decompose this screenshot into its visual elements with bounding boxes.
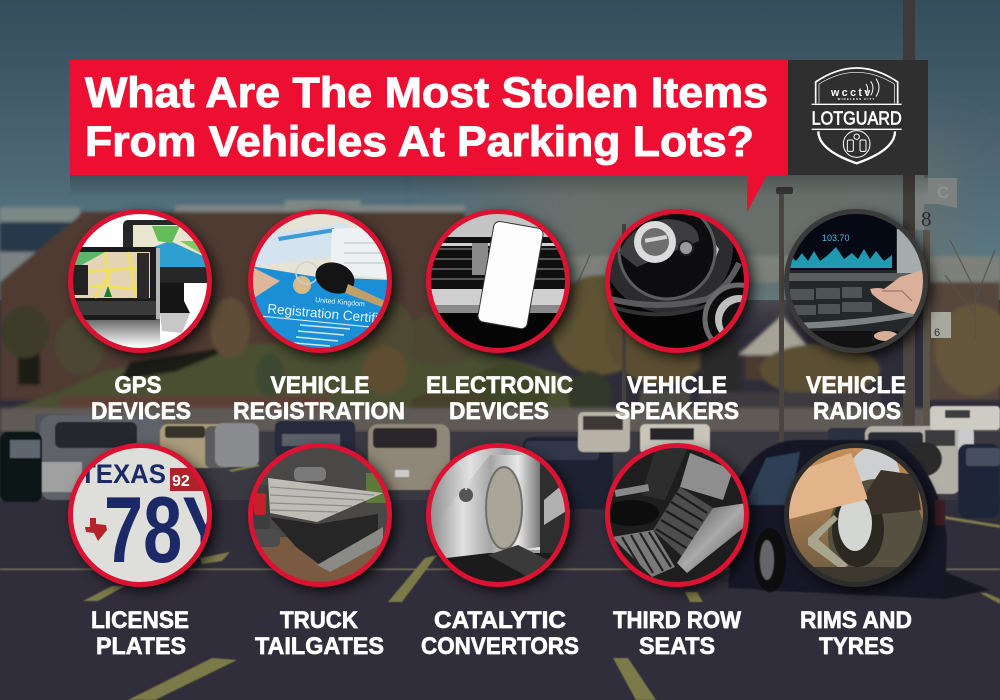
item: vehicle speakers	[604, 207, 761, 420]
title banner with speech-bubble tail	[70, 60, 928, 212]
icon: truck bed with tailgate	[250, 445, 390, 587]
label: VEHICLE	[627, 372, 727, 399]
sky	[0, 0, 1000, 300]
icon: GPS units	[68, 211, 213, 351]
lamp posts and lot signs: 6	[934, 327, 940, 339]
label: ELECTRONIC	[426, 372, 573, 399]
item: electronic devices	[426, 211, 573, 425]
icon: Texas plate: TEXAS	[80, 459, 166, 489]
logo wordmark: LOTGUARD	[812, 108, 902, 129]
label	[800, 607, 912, 660]
icon: Texas plate	[70, 445, 229, 585]
banner shadow	[70, 175, 928, 197]
label	[233, 372, 405, 425]
bare tree branches	[555, 240, 995, 350]
logo wordmark: WIRELESS CITY	[838, 97, 874, 101]
label: VEHICLE	[270, 372, 370, 399]
label: PLATES	[96, 633, 186, 660]
icon: Texas plate: 92	[172, 473, 190, 490]
item: rims and tyres	[786, 445, 926, 660]
icon: car speakers	[604, 207, 761, 364]
label: RADIOS	[813, 398, 901, 425]
label	[426, 372, 573, 425]
icon: Texas plate: 78Y	[104, 477, 229, 582]
icon: phone in air-vent mount	[428, 211, 568, 353]
item: truck tailgates	[250, 445, 390, 660]
label: THIRD ROW	[613, 607, 741, 634]
label: TAILGATES	[255, 633, 384, 660]
item: GPS devices	[68, 211, 213, 425]
label: GPS	[114, 372, 162, 399]
label: LICENSE	[91, 607, 189, 634]
label: DEVICES	[449, 398, 549, 425]
lamp posts and lot signs	[622, 0, 957, 450]
label: DEVICES	[91, 398, 191, 425]
lamp posts and lot signs: C	[937, 183, 949, 202]
label: SEATS	[639, 633, 715, 660]
icon: registration certificate with car key: Registration Certificate	[267, 301, 404, 328]
large dark blue car behind right circles	[725, 440, 990, 599]
label: RIMS AND	[800, 607, 912, 634]
icon: tyre being changed	[786, 445, 926, 591]
label: REGISTRATION	[233, 398, 405, 425]
asphalt	[0, 432, 1000, 502]
icon: dashboard radio: 103.70	[822, 233, 850, 243]
label	[615, 372, 739, 425]
label	[806, 372, 906, 425]
label	[421, 607, 579, 660]
banner tail	[747, 175, 767, 212]
label	[91, 372, 191, 425]
item: third row seats	[603, 445, 747, 660]
logo panel: LotGuard	[788, 60, 928, 175]
logo wordmark: wcctv	[830, 87, 870, 99]
icon: catalytic convertor	[428, 445, 568, 587]
label: TRUCK	[280, 607, 359, 634]
label: CONVERTORS	[421, 633, 579, 660]
item: license plates	[70, 445, 229, 660]
item: vehicle registration	[233, 211, 405, 425]
road markings	[0, 464, 1000, 700]
title text: From Vehicles At Parking Lots?	[85, 118, 754, 166]
label: CATALYTIC	[434, 607, 566, 634]
parked cars	[0, 406, 1000, 518]
label	[613, 607, 741, 660]
label	[91, 607, 189, 660]
building, hill and trees	[0, 200, 1000, 432]
icon: dashboard radio	[786, 211, 926, 351]
label: VEHICLE	[806, 372, 906, 399]
logo wordmark	[812, 87, 902, 129]
item: vehicle radios	[786, 211, 926, 425]
icon: registration certificate with car key: United Kingdom	[315, 297, 365, 308]
title text: What Are The Most Stolen Items	[85, 69, 768, 117]
label	[255, 607, 384, 660]
logo shield outline	[812, 68, 902, 163]
lamp posts and lot signs: 8	[921, 207, 932, 231]
icon: registration certificate with car key	[250, 211, 404, 351]
banner background	[70, 60, 788, 175]
label: TYRES	[819, 633, 894, 660]
icon: leather seats	[603, 445, 747, 585]
item: catalytic convertors	[421, 445, 579, 660]
title text	[85, 69, 768, 166]
label: SPEAKERS	[615, 398, 739, 425]
